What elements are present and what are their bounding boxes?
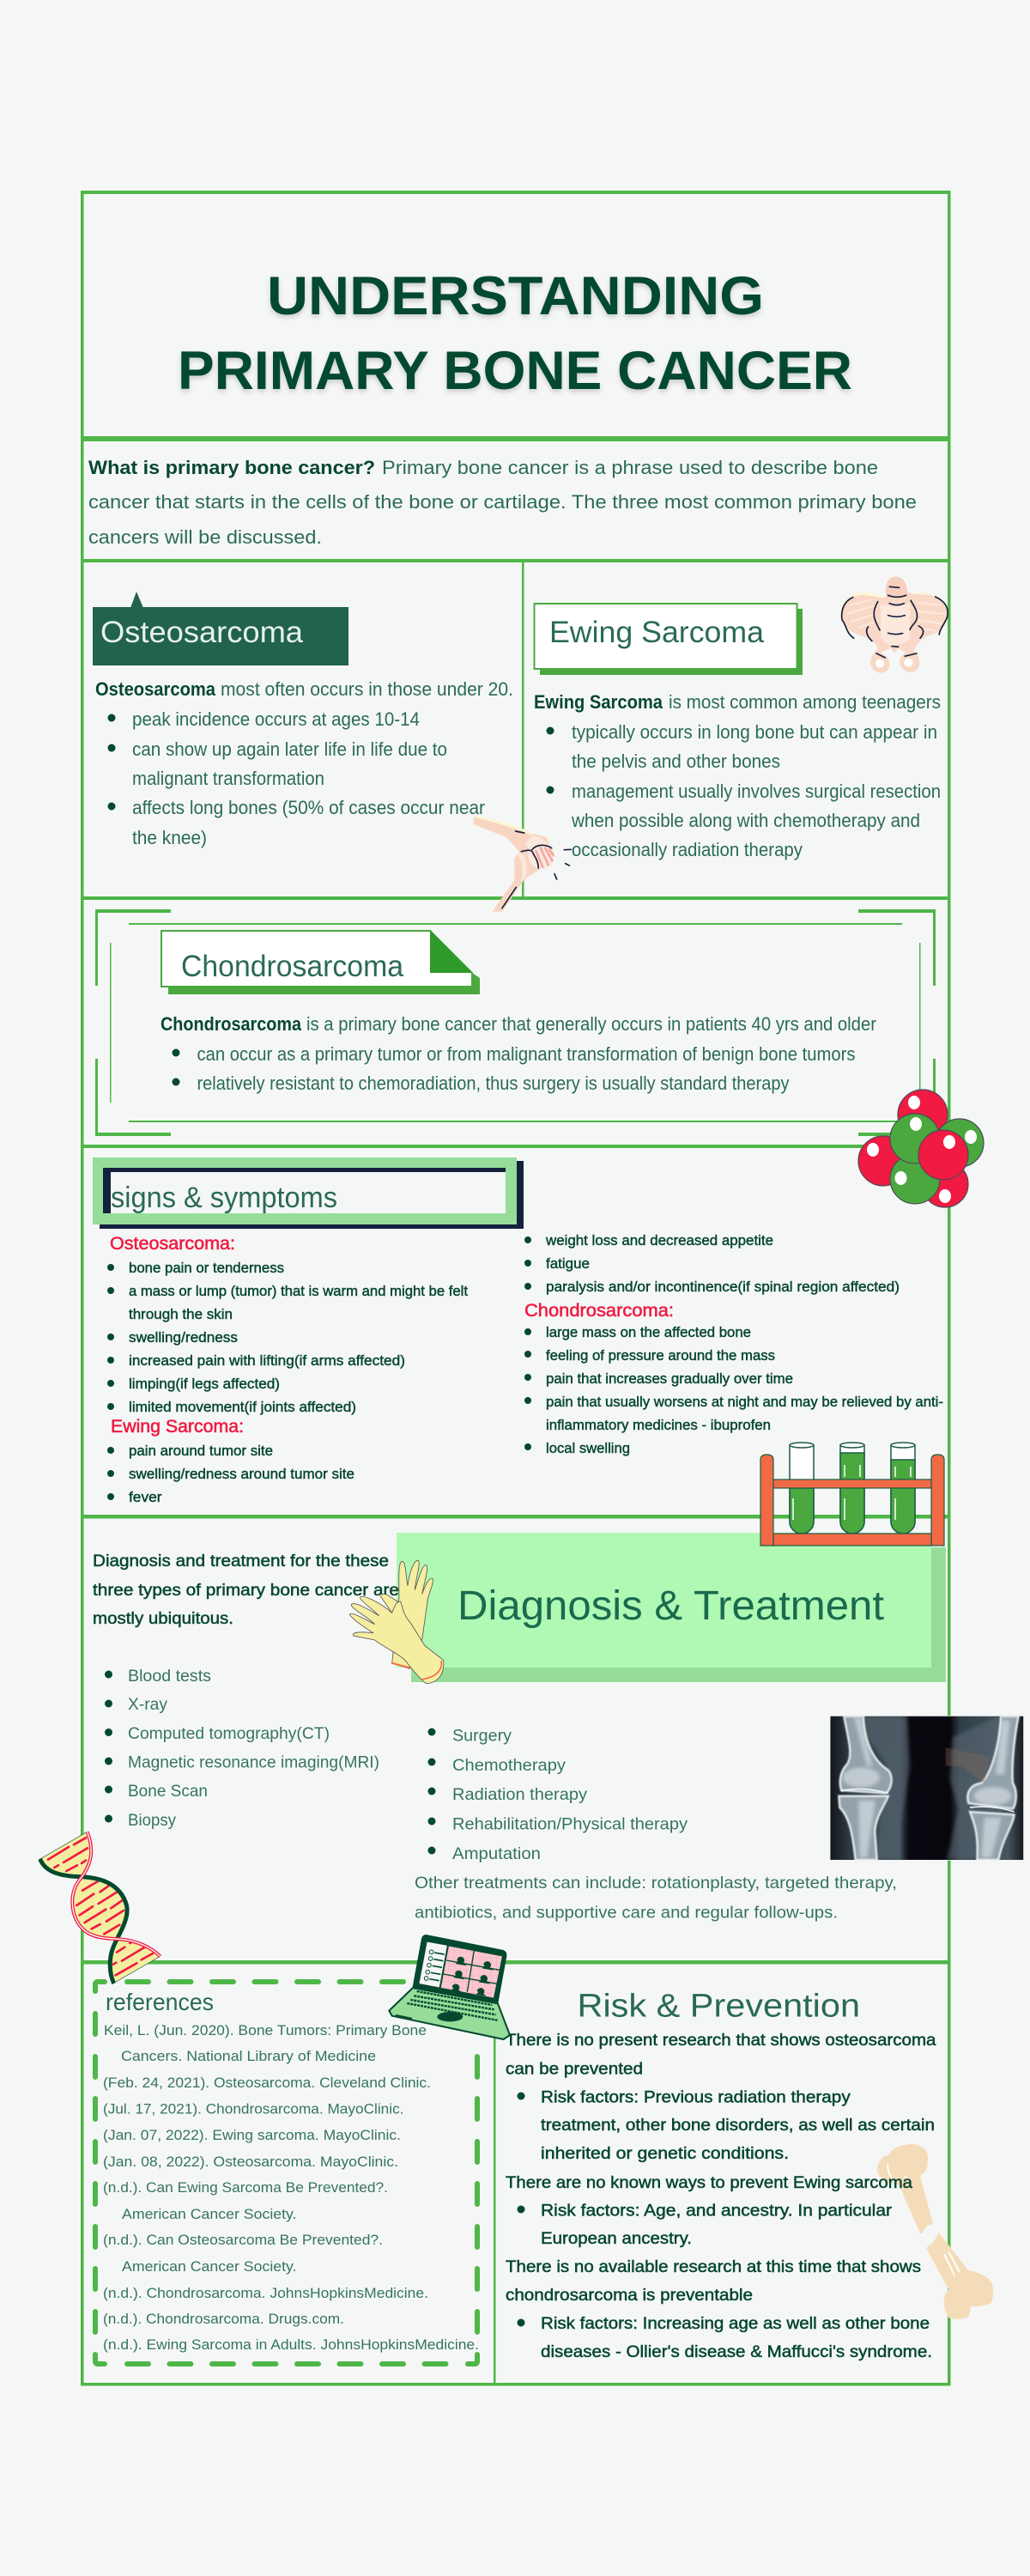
symptoms: right column: large mass on the affected bone bbox=[546, 1324, 751, 1340]
decorative bracket frame bbox=[95, 909, 936, 1136]
risk and prevention text: There is no available research at this time that shows bbox=[506, 2257, 921, 2276]
ewing sarcoma text: occasionally radiation therapy bbox=[572, 839, 803, 860]
chondrosarcoma heading label bbox=[161, 930, 480, 994]
references list: Cancers. National Library of Medicine bbox=[121, 2048, 376, 2064]
infographic frame bbox=[81, 191, 951, 2385]
panel: osteosarcoma bbox=[93, 592, 513, 848]
symptoms: right column bbox=[524, 1232, 943, 1456]
ewing sarcoma text: is most common among teenagers bbox=[669, 691, 941, 713]
chondrosarcoma text: can occur as a primary tumor or from malignant transformation of benign bone tumors bbox=[197, 1043, 855, 1065]
symptoms: left column: through the skin bbox=[129, 1306, 233, 1322]
diagnosis intro text: Diagnosis and treatment for the these bbox=[93, 1552, 389, 1571]
other treatments text bbox=[415, 1874, 897, 1922]
references heading: references bbox=[106, 1989, 214, 2015]
ewing sarcoma heading label bbox=[534, 604, 803, 675]
references list: American Cancer Society. bbox=[122, 2258, 297, 2275]
ewing sarcoma heading label: Ewing Sarcoma bbox=[549, 616, 765, 649]
chondrosarcoma heading label: Chondrosarcoma bbox=[181, 950, 404, 983]
diagnosis intro text bbox=[93, 1552, 399, 1628]
intro text: what is primary bone cancer: Primary bone cancer is a phrase used to describe bone bbox=[382, 457, 878, 478]
icon: broken bone bbox=[877, 2144, 993, 2319]
icon: knee bbox=[474, 817, 571, 912]
symptoms: left column: a mass or lump (tumor) that is warm and might be felt bbox=[129, 1283, 468, 1299]
icon: cell cluster bbox=[858, 1090, 984, 1207]
symptoms: left column: Osteosarcoma: bbox=[110, 1234, 235, 1254]
icon: gloves bbox=[349, 1560, 444, 1684]
diagnosis and treatment heading label: Diagnosis & Treatment bbox=[457, 1583, 884, 1629]
title: UNDERSTANDING bbox=[267, 266, 764, 326]
symptoms: left column: swelling/redness bbox=[129, 1329, 238, 1346]
intro text: what is primary bone cancer bbox=[88, 457, 917, 548]
image: knee x-ray bbox=[830, 1716, 1024, 1861]
treatments list: Chemotherapy bbox=[452, 1756, 566, 1775]
symptoms: left column: increased pain with lifting(if arms affected) bbox=[129, 1352, 405, 1369]
signs and symptoms heading label: signs & symptoms bbox=[111, 1182, 337, 1214]
chondrosarcoma text: is a primary bone cancer that generally occurs in patients 40 yrs and older bbox=[306, 1013, 876, 1035]
references list: (Jul. 17, 2021). Chondrosarcoma. MayoClinic. bbox=[103, 2100, 403, 2117]
osteosarcoma heading label bbox=[93, 592, 348, 665]
risk and prevention text: Risk factors: Increasing age as well as other bone bbox=[541, 2314, 930, 2333]
references list: (Jan. 07, 2022). Ewing sarcoma. MayoClinic. bbox=[103, 2127, 401, 2143]
chondrosarcoma text: Chondrosarcoma bbox=[161, 1013, 301, 1035]
references list: (n.d.). Chondrosarcoma. Drugs.com. bbox=[103, 2311, 344, 2327]
treatments list: Rehabilitation/Physical therapy bbox=[452, 1815, 688, 1834]
chondrosarcoma text: relatively resistant to chemoradiation, thus surgery is usually standard therapy bbox=[197, 1072, 790, 1094]
risk and prevention text: There is no present research that shows osteosarcoma bbox=[506, 2031, 936, 2050]
osteosarcoma text: malignant transformation bbox=[132, 768, 324, 789]
ewing sarcoma text bbox=[534, 691, 941, 860]
symptoms: left column: swelling/redness around tumor site bbox=[129, 1466, 354, 1482]
dashed border bbox=[95, 1982, 477, 2364]
signs and symptoms heading label bbox=[93, 1157, 524, 1229]
risk and prevention text: inherited or genetic conditions. bbox=[541, 2144, 789, 2163]
panel: chondrosarcoma bbox=[95, 909, 936, 1136]
risk and prevention text: can be prevented bbox=[506, 2059, 643, 2078]
ewing sarcoma text: Ewing Sarcoma bbox=[534, 691, 663, 713]
treatments list: Radiation therapy bbox=[452, 1785, 587, 1804]
treatments list: Surgery bbox=[452, 1726, 512, 1745]
symptoms: left column: bone pain or tenderness bbox=[129, 1260, 284, 1276]
references list: Keil, L. (Jun. 2020). Bone Tumors: Primary Bone bbox=[104, 2022, 427, 2038]
diagnostics list bbox=[105, 1667, 379, 1830]
diagnosis intro text: mostly ubiquitous. bbox=[93, 1609, 233, 1628]
risk and prevention text: European ancestry. bbox=[541, 2229, 692, 2248]
ewing sarcoma text: typically occurs in long bone but can appear in bbox=[572, 721, 937, 743]
icon: test tubes bbox=[760, 1443, 944, 1546]
panel: signs and symptoms bbox=[93, 1157, 943, 1505]
osteosarcoma text: can show up again later life in life due to bbox=[132, 738, 447, 760]
title bbox=[178, 266, 852, 401]
diagnostics list: Computed tomography(CT) bbox=[128, 1724, 330, 1743]
risk and prevention text: There are no known ways to prevent Ewing sarcoma bbox=[506, 2173, 912, 2192]
osteosarcoma text: Osteosarcoma bbox=[95, 678, 215, 700]
title: PRIMARY BONE CANCER bbox=[178, 341, 852, 401]
references list: (n.d.). Ewing Sarcoma in Adults. JohnsHopkinsMedicine. bbox=[103, 2336, 479, 2353]
references list bbox=[103, 2022, 479, 2353]
ewing sarcoma text: when possible along with chemotherapy and bbox=[571, 810, 920, 831]
icon: dna strand bbox=[40, 1832, 161, 1984]
symptoms: right column: pain that increases gradually over time bbox=[546, 1370, 793, 1387]
risk and prevention text: diseases - Ollier's disease & Maffucci's syndrome. bbox=[541, 2342, 932, 2361]
diagnostics list: X-ray bbox=[128, 1695, 167, 1714]
symptoms: right column: paralysis and/or incontinence(if spinal region affected) bbox=[546, 1279, 900, 1295]
other treatments text: antibiotics, and supportive care and regular follow-ups. bbox=[415, 1903, 838, 1922]
symptoms: right column: inflammatory medicines - ibuprofen bbox=[546, 1417, 771, 1433]
symptoms: right column: feeling of pressure around the mass bbox=[546, 1347, 775, 1364]
references list: (Feb. 24, 2021). Osteosarcoma. Cleveland Clinic. bbox=[103, 2075, 431, 2091]
risk and prevention text: Risk factors: Previous radiation therapy bbox=[541, 2088, 851, 2107]
references list: (n.d.). Chondrosarcoma. JohnsHopkinsMedicine. bbox=[103, 2285, 428, 2301]
symptoms: right column: Chondrosarcoma: bbox=[524, 1301, 674, 1321]
osteosarcoma text bbox=[95, 678, 513, 848]
icon: laptop bbox=[389, 1935, 510, 2039]
symptoms: right column: fatigue bbox=[546, 1255, 590, 1272]
chondrosarcoma text bbox=[161, 1013, 876, 1094]
risk and prevention heading: Risk & Prevention bbox=[577, 1989, 860, 2025]
ewing sarcoma text: the pelvis and other bones bbox=[572, 750, 780, 772]
references list: (n.d.). Can Osteosarcoma Be Prevented?. bbox=[103, 2232, 383, 2248]
treatments list: Amputation bbox=[452, 1844, 541, 1863]
panel: ewing sarcoma bbox=[534, 604, 941, 860]
icon: pelvis bbox=[839, 577, 948, 673]
osteosarcoma text: the knee) bbox=[132, 827, 207, 848]
intro text: what is primary bone cancer: cancers will be discussed. bbox=[88, 526, 322, 548]
diagnosis intro text: three types of primary bone cancer are bbox=[93, 1581, 399, 1600]
ewing sarcoma text: management usually involves surgical resection bbox=[572, 781, 941, 802]
references list: (Jan. 08, 2022). Osteosarcoma. MayoClinic. bbox=[103, 2154, 398, 2170]
diagnostics list: Bone Scan bbox=[128, 1782, 208, 1801]
symptoms: left column: limited movement(if joints affected) bbox=[129, 1399, 356, 1415]
risk and prevention text: treatment, other bone disorders, as well as certain bbox=[541, 2116, 935, 2135]
intro text: what is primary bone cancer: What is primary bone cancer? bbox=[88, 457, 375, 478]
diagnostics list: Blood tests bbox=[128, 1667, 211, 1686]
osteosarcoma text: peak incidence occurs at ages 10-14 bbox=[132, 708, 420, 730]
treatments list bbox=[427, 1726, 688, 1863]
symptoms: left column: pain around tumor site bbox=[129, 1443, 273, 1459]
diagnostics list: Biopsy bbox=[128, 1811, 176, 1830]
osteosarcoma text: most often occurs in those under 20. bbox=[221, 678, 513, 700]
symptoms: left column: Ewing Sarcoma: bbox=[111, 1417, 244, 1437]
symptoms: right column: local swelling bbox=[546, 1440, 630, 1456]
risk and prevention text bbox=[506, 2031, 936, 2361]
symptoms: right column: pain that usually worsens at night and may be relieved by anti- bbox=[546, 1394, 943, 1410]
diagnostics list: Magnetic resonance imaging(MRI) bbox=[128, 1753, 379, 1772]
osteosarcoma text: affects long bones (50% of cases occur near bbox=[132, 797, 485, 818]
references list: (n.d.). Can Ewing Sarcoma Be Prevented?. bbox=[103, 2179, 388, 2196]
risk and prevention text: chondrosarcoma is preventable bbox=[506, 2286, 753, 2305]
osteosarcoma heading label: Osteosarcoma bbox=[100, 616, 304, 649]
panel: risk and prevention bbox=[506, 1989, 936, 2361]
symptoms: left column bbox=[107, 1234, 468, 1505]
other treatments text: Other treatments can include: rotationplasty, targeted therapy, bbox=[415, 1874, 897, 1893]
symptoms: right column: weight loss and decreased appetite bbox=[545, 1232, 773, 1249]
symptoms: left column: fever bbox=[129, 1489, 162, 1505]
references list: American Cancer Society. bbox=[122, 2206, 297, 2222]
panel: references bbox=[95, 1982, 479, 2364]
diagnosis and treatment heading label bbox=[397, 1533, 946, 1682]
risk and prevention text: Risk factors: Age, and ancestry. In particular bbox=[541, 2202, 893, 2221]
symptoms: left column: limping(if legs affected) bbox=[129, 1376, 280, 1392]
panel: diagnosis and treatment bbox=[93, 1533, 946, 1922]
intro text: what is primary bone cancer: cancer that starts in the cells of the bone or cartilage. The three most common primary bone bbox=[88, 491, 917, 513]
